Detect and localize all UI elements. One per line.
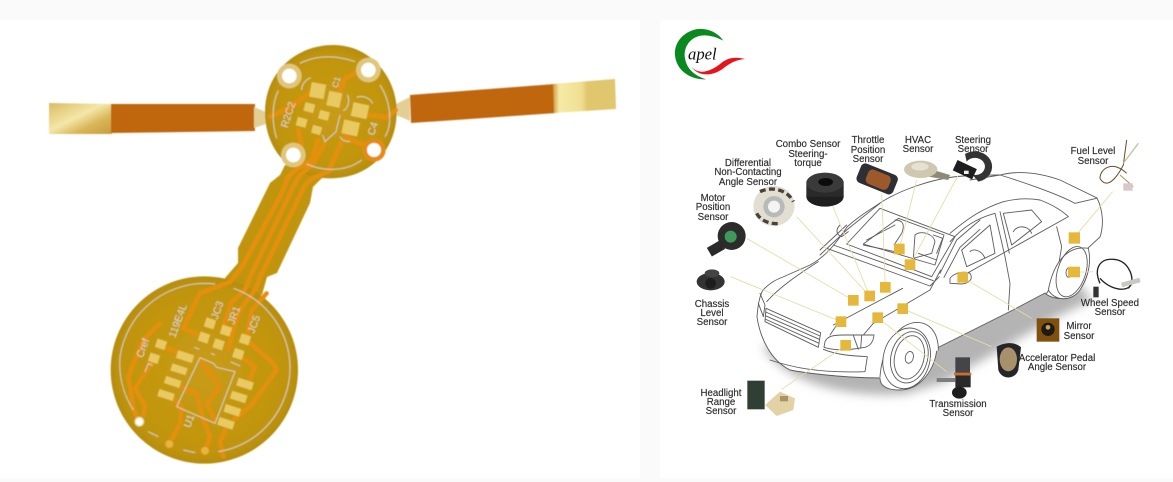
label: wheel speed sensor: Wheel Speed	[1081, 298, 1139, 309]
logo wordmark: apel	[688, 44, 717, 63]
front bumper	[770, 349, 867, 372]
bottom board silk labels: JC5	[246, 314, 263, 335]
label: motor position sensor: Sensor	[698, 212, 729, 223]
label: mirror sensor: Sensor	[1064, 331, 1095, 342]
car shadow	[762, 262, 1092, 395]
icon: combo sensor	[806, 173, 844, 207]
sensor labels	[695, 135, 1139, 419]
side mirror	[950, 272, 971, 284]
logo green ring	[675, 29, 723, 79]
label: motor position sensor: Position	[696, 202, 730, 213]
icon: motor position sensor	[707, 222, 746, 256]
bottom board silk labels: U1	[182, 413, 197, 429]
top circular board	[265, 45, 397, 178]
label: fuel level sensor: Sensor	[1078, 156, 1109, 167]
top board mounting holes	[277, 58, 386, 167]
sensors, leaders and markers	[697, 140, 1140, 416]
icon: HVAC sensor	[904, 161, 950, 180]
label: accelerator pedal sensor: Angle Sensor	[1028, 362, 1087, 373]
top board copper traces	[270, 72, 396, 178]
logo: Capel	[675, 29, 745, 79]
icon: fuel level sensor	[1100, 140, 1138, 191]
top board solder pads	[296, 82, 369, 137]
icon: mirror sensor	[1037, 318, 1059, 342]
label: motor position sensor: Motor	[701, 193, 725, 204]
car front details	[758, 262, 941, 394]
top board silk labels: C1	[330, 75, 343, 89]
headlight	[824, 335, 874, 350]
bottom board silk labels: JC3	[210, 300, 227, 321]
bottom board solder pads	[148, 317, 254, 430]
car sensor diagram	[757, 173, 1102, 395]
label: HVAC sensor: HVAC	[905, 135, 931, 146]
label: throttle position sensor: Sensor	[853, 154, 884, 165]
front wheel	[877, 322, 938, 394]
label: mirror sensor: Mirror	[1066, 321, 1092, 332]
panel: left background	[0, 20, 640, 478]
flex neck	[222, 165, 330, 295]
icon: steering sensor	[953, 151, 992, 182]
label: chassis level sensor: Chassis	[695, 299, 729, 310]
label: steering sensor: Sensor	[958, 144, 989, 155]
label: wheel speed sensor: Sensor	[1095, 307, 1126, 318]
label: accelerator pedal sensor: Accelerator Pedal	[1019, 353, 1095, 364]
label: headlight range sensor: Headlight	[701, 388, 741, 399]
car silhouette	[757, 173, 1102, 390]
hood lines	[758, 262, 941, 335]
icon: differential angle sensor	[749, 181, 799, 231]
top board silk labels	[280, 75, 381, 137]
left connector strip	[49, 103, 255, 134]
doors and rear	[950, 175, 1097, 310]
label: throttle position sensor: Throttle	[852, 135, 884, 146]
label: combo sensor: Combo Sensor	[776, 139, 840, 150]
bottom board silk labels: JR1	[226, 305, 243, 326]
label: chassis level sensor: Level	[700, 308, 724, 319]
logo red swoosh	[691, 58, 745, 74]
label: transmission sensor: Transmission	[929, 399, 987, 410]
top board silk labels: R2C2	[280, 101, 298, 129]
bottom board silk outline	[120, 283, 290, 453]
bottom board silk labels	[135, 300, 263, 429]
strip joints	[254, 97, 410, 128]
bottom board holes and vias	[134, 417, 209, 455]
label: differential angle sensor: Angle Sensor	[719, 177, 778, 188]
top board silk labels: C4	[366, 121, 381, 137]
icon: accelerator pedal sensor	[997, 343, 1021, 377]
icon: headlight range sensor	[747, 381, 795, 416]
top board silk outline	[273, 57, 390, 169]
label: combo sensor: Steering-	[788, 149, 828, 160]
label: transmission sensor: Sensor	[943, 408, 974, 419]
icon: chassis level sensor	[697, 269, 725, 290]
label: combo sensor: torque	[794, 158, 822, 169]
flexible PCB	[49, 45, 616, 464]
label: headlight range sensor: Range	[707, 397, 735, 408]
icon: throttle position sensor	[855, 162, 899, 196]
rear wheel	[1048, 243, 1093, 301]
label: differential angle sensor: Differential	[725, 158, 771, 169]
front grille	[765, 308, 821, 347]
panel: right background	[660, 20, 1173, 478]
neck copper traces	[230, 175, 313, 290]
bottom board silk labels: 119E4L	[167, 303, 190, 339]
bottom circular board	[111, 276, 298, 464]
label: HVAC sensor: Sensor	[903, 144, 934, 155]
icon: wheel speed sensor	[1093, 259, 1140, 297]
label: steering sensor: Steering	[955, 135, 991, 146]
icon: transmission sensor	[937, 357, 971, 399]
bottom board silk labels: Cref	[135, 337, 152, 359]
label: differential angle sensor: Non-Contacting	[714, 167, 782, 178]
label: throttle position sensor: Position	[851, 145, 885, 156]
sensor markers	[836, 232, 1080, 351]
label: chassis level sensor: Sensor	[697, 317, 728, 328]
label: fuel level sensor: Fuel Level	[1071, 146, 1115, 157]
leader lines	[731, 175, 1113, 389]
bottom board copper traces	[128, 282, 277, 457]
windshield and interior	[820, 203, 980, 286]
right connector strip	[410, 79, 616, 123]
label: headlight range sensor: Sensor	[706, 406, 737, 417]
